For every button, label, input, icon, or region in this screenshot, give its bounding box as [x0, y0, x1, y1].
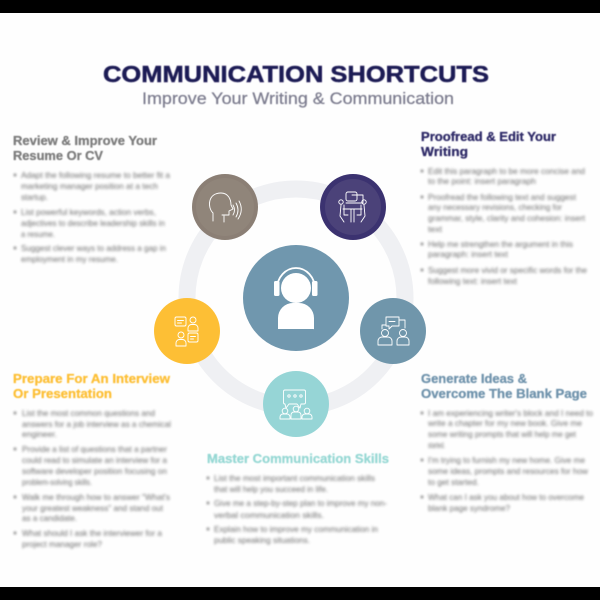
bullet list: proofread: to the point: insert paragraph — [428, 176, 536, 186]
bullet list: prepare: What should I ask the interviewer for a — [22, 528, 162, 538]
heading: review: Review & Improve Your — [13, 134, 157, 148]
bullet list: master: public speaking situations. — [214, 535, 310, 545]
bullet list: prepare: answers for a job interview as a chemical — [22, 419, 171, 429]
bullet list: prepare: could read to simulate an interview for a — [22, 455, 167, 465]
bullet list: review: List powerful keywords, action verbs, — [21, 207, 156, 217]
heading: review: Resume Or CV — [13, 149, 104, 163]
bullet list: review: Suggest clever ways to address a gap in — [21, 243, 166, 253]
bullet list: proofread: Help me strengthen the argument in this — [428, 239, 573, 249]
heading: generate — [421, 372, 587, 401]
panel: generate ideas — [421, 372, 593, 513]
bullet list: generate: I am experiencing writer's block and I need to — [428, 408, 593, 418]
bullet list: master: that will help you succeed in life. — [214, 484, 328, 494]
bullet list: review: Adapt the following resume to better fit a — [21, 170, 170, 180]
bullet list: proofread — [421, 166, 587, 286]
heading: generate: Overcome The Blank Page — [421, 387, 587, 401]
heading: prepare: Prepare For An Interview — [13, 372, 170, 386]
icon: speaking head — [192, 174, 258, 240]
bullet list: prepare: software developer position focusing on — [22, 466, 167, 476]
heading: proofread: Writing — [421, 145, 468, 159]
bullet list: proofread: Proofread the following text and suggest — [428, 192, 577, 202]
panel: review and improve resume — [13, 134, 170, 264]
bullet list: review: adjectives to describe leadership skills in — [21, 218, 165, 228]
icon: interview conversation — [154, 298, 220, 364]
bullet list: review: marketing manager position at a tech — [21, 181, 158, 191]
bullet list: generate: blank page syndrome? — [428, 503, 510, 513]
heading: prepare — [13, 372, 170, 401]
bullet list: proofread: text — [428, 224, 443, 234]
bullet list: proofread: following text: insert text — [428, 276, 518, 286]
panel: prepare for interview — [13, 372, 171, 549]
heading: proofread: Proofread & Edit Your — [421, 130, 556, 144]
diagram: ring of icons — [154, 174, 426, 437]
bullet list: master: List the most important communication skills — [214, 473, 375, 483]
bullet list: generate: some writing prompts that will help me get — [428, 429, 577, 439]
ring — [187, 189, 405, 407]
bullet list: master — [207, 473, 387, 545]
bullet list: generate: What can I ask you about how to overcome — [428, 492, 584, 502]
bullet list: generate: some ideas, prompts and resources for how — [428, 466, 589, 476]
heading: prepare: Or Presentation — [13, 387, 112, 401]
heading: master: Master Communication Skills — [207, 452, 389, 466]
bullet list: prepare: project manager role? — [22, 539, 102, 549]
icon: central person with headset — [243, 245, 349, 351]
bullet list: prepare: engineer. — [22, 429, 57, 439]
bullet list: master: Give me a step-by-step plan to improve my non- — [214, 498, 387, 508]
bullet list: proofread: grammar, style, clarity and cohesion: insert — [428, 213, 586, 223]
heading: generate: Generate Ideas & — [421, 372, 527, 386]
bullet list: proofread: any necessary revisions, checking for — [428, 202, 562, 212]
panel: proofread and edit — [421, 130, 587, 286]
bullet list: prepare: Walk me through how to answer "What's — [22, 492, 170, 502]
bullet list: generate: to get started. — [428, 477, 479, 487]
bullet list: review: a resume. — [21, 229, 55, 239]
bullet list: review: startup. — [21, 192, 48, 202]
bullet list: review: employment in my resume. — [21, 254, 118, 264]
bullet list: prepare: your greatest weakness" and stand out — [22, 503, 164, 513]
icon: group discussion — [263, 371, 329, 437]
bullet list: prepare: Provide a list of questions that a partner — [22, 444, 167, 454]
bullet list: generate: I'm trying to furnish my new home. Give me — [428, 455, 585, 465]
bullet list: prepare: as a candidate. — [22, 513, 77, 523]
bullet list: generate: started. — [428, 440, 445, 450]
bullet list: proofread: paragraph: insert text — [428, 249, 509, 259]
bullet list: prepare — [14, 408, 171, 549]
icon: two people with shared idea — [360, 298, 426, 364]
icon: two people at a table — [320, 174, 386, 240]
bullet list: master: verbal communication skills. — [214, 510, 324, 520]
heading: review — [13, 134, 157, 163]
bullet list: generate: write a chapter for my new book. Give me — [427, 418, 582, 428]
bullet list: prepare: List the most common questions and — [22, 408, 155, 418]
bullet list: review — [14, 170, 170, 264]
subtitle: Improve Your Writing & Communication — [142, 89, 454, 108]
panel: master communication skills — [207, 452, 389, 545]
bullet list: proofread: Edit this paragraph to be more concise and — [428, 166, 585, 176]
title: COMMUNICATION SHORTCUTS — [103, 61, 489, 87]
bullet list: master: Explain how to improve my communication in — [214, 524, 378, 534]
bullet list: prepare: problem-solving skills. — [22, 477, 92, 487]
bullet list: proofread: Suggest more vivid or specific words for the — [428, 265, 587, 275]
heading: proofread — [421, 130, 556, 159]
bullet list: generate — [421, 408, 593, 513]
